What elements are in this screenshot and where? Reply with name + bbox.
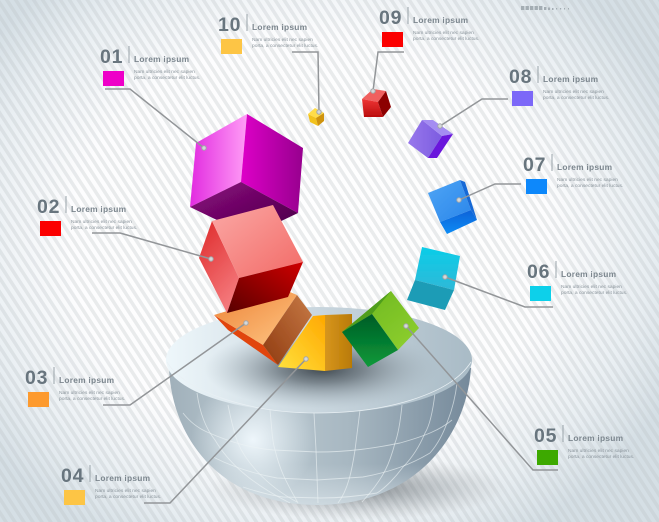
label 08: porta, a consectetur elit luctus.: [543, 95, 609, 101]
label 06: [527, 261, 627, 301]
label 08: 08: [509, 66, 532, 88]
cube 03 orange: [214, 292, 312, 365]
cube 04 yellow: [278, 314, 352, 371]
label 02: porta, a consectetur elit luctus.: [71, 225, 137, 231]
label 02: [37, 196, 137, 236]
label 01: [100, 46, 200, 86]
cube 05 green: [342, 291, 419, 367]
leader line 08: [438, 99, 508, 128]
leader line 10: [292, 52, 321, 114]
leader line 03: [103, 321, 248, 405]
leader line 01: [105, 89, 206, 150]
label 02: Nam ultricies elit nec sapien: [71, 219, 132, 225]
label 03: porta, a consectetur elit luctus.: [59, 396, 125, 402]
label 05: 05: [534, 425, 557, 447]
label 10: 10: [218, 14, 241, 36]
label 08: Nam ultricies elit nec sapien: [543, 89, 604, 95]
label 07: Nam ultricies elit nec sapien: [557, 177, 618, 183]
cube 02 red: [199, 205, 303, 313]
label 08: [509, 66, 609, 106]
label 05: Lorem ipsum: [568, 433, 623, 443]
label 06: 06: [527, 261, 550, 283]
cube 08 purple: [408, 120, 453, 158]
watermark dots top right: [521, 6, 569, 10]
label 03: 03: [25, 367, 48, 389]
cube 10 yellow small: [308, 108, 324, 126]
label 08: Lorem ipsum: [543, 74, 598, 84]
label 03: Nam ultricies elit nec sapien: [59, 390, 120, 396]
label 01: 01: [100, 46, 123, 68]
label 09: [379, 7, 479, 47]
label 04: Nam ultricies elit nec sapien: [95, 488, 156, 494]
label 01: porta, a consectetur elit luctus.: [134, 75, 200, 81]
label 07: 07: [523, 154, 546, 176]
label 10: [218, 14, 318, 54]
label 07: [523, 154, 623, 194]
bowl top surface: [166, 307, 472, 413]
label 10: Lorem ipsum: [252, 22, 307, 32]
label 06: porta, a consectetur elit luctus.: [561, 290, 627, 296]
label 09: porta, a consectetur elit luctus.: [413, 36, 479, 42]
label 04: [61, 465, 161, 505]
leader line 02: [92, 233, 213, 261]
label 02: Lorem ipsum: [71, 204, 126, 214]
label 09: Lorem ipsum: [413, 15, 468, 25]
cube 07 blue: [428, 180, 477, 234]
label 07: Lorem ipsum: [557, 162, 612, 172]
label 01: Lorem ipsum: [134, 54, 189, 64]
cube 06 cyan: [407, 247, 460, 310]
label 04: porta, a consectetur elit luctus.: [95, 494, 161, 500]
leader line 09: [371, 52, 404, 93]
label 04: 04: [61, 465, 84, 487]
hemisphere bowl: [166, 307, 472, 505]
label 10: Nam ultricies elit nec sapien: [252, 37, 313, 43]
label 05: porta, a consectetur elit luctus.: [568, 454, 634, 460]
leader line 07: [457, 184, 521, 202]
label 07: porta, a consectetur elit luctus.: [557, 183, 623, 189]
label 03: [25, 367, 125, 407]
label 09: 09: [379, 7, 402, 29]
label 05: [534, 425, 634, 465]
label 09: Nam ultricies elit nec sapien: [413, 30, 474, 36]
leader line 05: [404, 324, 558, 470]
cube 01 magenta: [190, 114, 303, 236]
label 06: Nam ultricies elit nec sapien: [561, 284, 622, 290]
label 10: porta, a consectetur elit luctus.: [252, 43, 318, 49]
cube 09 red small: [362, 89, 391, 117]
label 03: Lorem ipsum: [59, 375, 114, 385]
label 04: Lorem ipsum: [95, 473, 150, 483]
leader line 06: [443, 275, 553, 307]
label 01: Nam ultricies elit nec sapien: [134, 69, 195, 75]
leader line 04: [144, 357, 308, 503]
label 05: Nam ultricies elit nec sapien: [568, 448, 629, 454]
ground shadow: [208, 456, 508, 520]
label 06: Lorem ipsum: [561, 269, 616, 279]
label 02: 02: [37, 196, 60, 218]
